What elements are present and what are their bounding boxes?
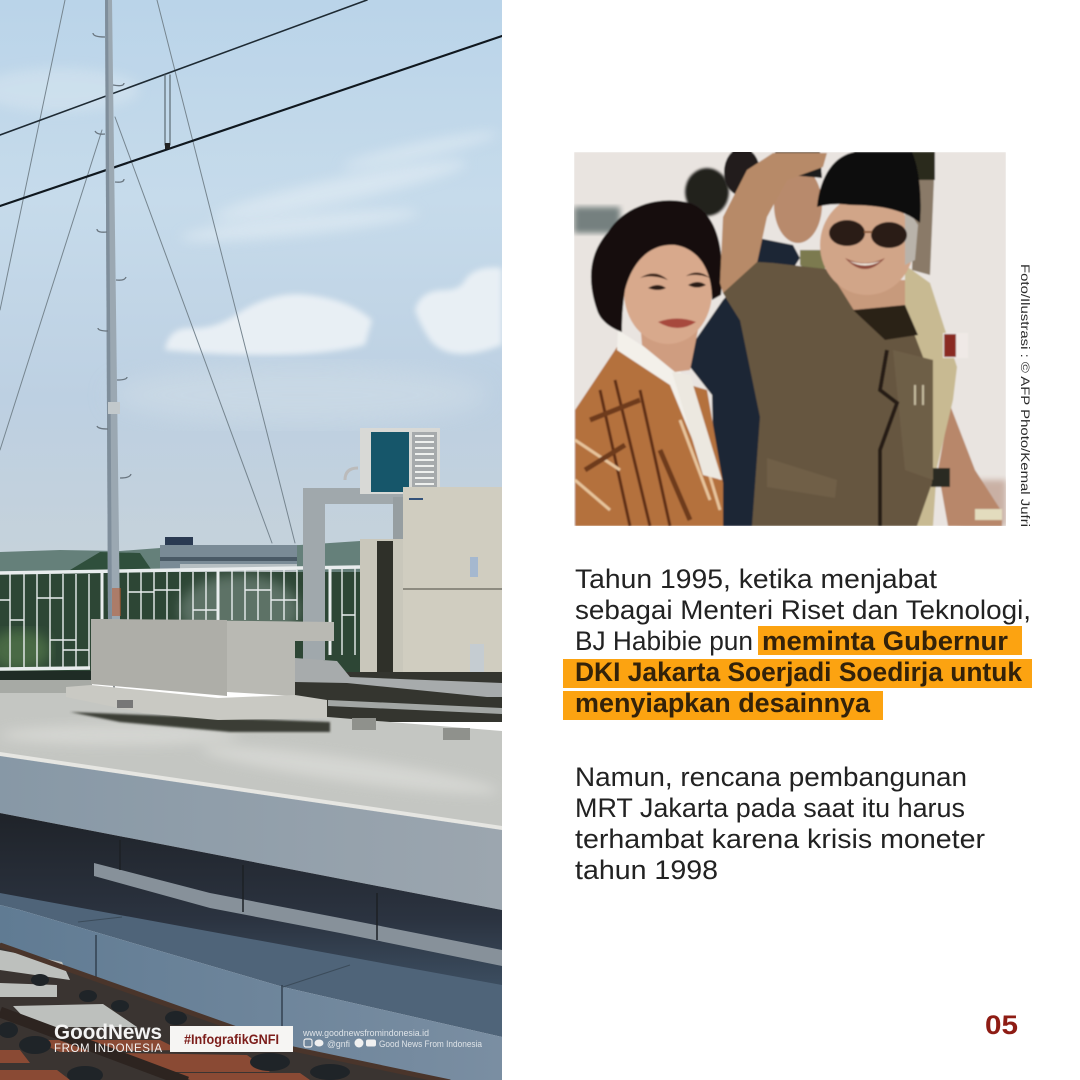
overhead wires bbox=[0, 0, 502, 543]
text block: paragraph 2: Namun, rencana pembangunan bbox=[575, 762, 967, 792]
footer: GoodNews logo bbox=[54, 1021, 162, 1055]
icon: twitter bbox=[314, 1040, 324, 1046]
text block: paragraph 1: BJ Habibie pun bbox=[575, 626, 753, 656]
footer: hashtag badge: #InfografikGNFI bbox=[184, 1032, 279, 1047]
utility pole bbox=[93, 0, 131, 720]
highlight: orange bars bbox=[563, 626, 1032, 720]
white fence railing bbox=[0, 567, 360, 669]
icon: youtube bbox=[366, 1040, 376, 1046]
text block: paragraph 2: tahun 1998 bbox=[575, 855, 718, 885]
text block: paragraph 1: meminta Gubernur bbox=[762, 626, 1008, 656]
blurred background bbox=[574, 148, 1006, 526]
officer in khaki uniform bbox=[893, 152, 1002, 526]
text block: paragraph 1: sebagai Menteri Riset dan Teknologi, bbox=[575, 595, 1031, 625]
icon: instagram bbox=[304, 1039, 312, 1047]
man waving in brown shirt bbox=[720, 152, 933, 526]
clouds in the sky bbox=[0, 68, 502, 425]
slab edge bbox=[0, 756, 502, 910]
roof floor bbox=[0, 693, 502, 830]
footer: GoodNews logo: GoodNews bbox=[54, 1021, 162, 1044]
concrete track wall bbox=[0, 893, 502, 1080]
metal duct tray bbox=[295, 658, 502, 722]
footer: website and social handles: Good News From Indonesia bbox=[379, 1039, 483, 1050]
panel: railway rooftop photo bbox=[0, 0, 502, 1080]
woman in batik jacket bbox=[575, 200, 723, 526]
photo credit: Foto/Ilustrasi : © AFP Photo/Kemal Jufri bbox=[1018, 264, 1030, 527]
AC units on frame bbox=[303, 428, 502, 677]
footer: hashtag badge bbox=[170, 1026, 293, 1052]
panel: photo of BJ Habibie and his wife bbox=[574, 148, 1006, 526]
dark gap with cable tray bbox=[0, 813, 502, 990]
text block: paragraph 2 bbox=[575, 762, 985, 885]
footer: website and social handles: @gnfi bbox=[327, 1039, 350, 1050]
page number: 05 bbox=[985, 1010, 1018, 1040]
text block: paragraph 1: DKI Jakarta Soerjadi Soedirja untuk bbox=[575, 657, 1023, 687]
text block: paragraph 1: menyiapkan desainnya bbox=[575, 688, 871, 718]
footer: website and social handles bbox=[302, 1028, 483, 1050]
distant trees and building bbox=[0, 537, 360, 672]
text block: paragraph 1 bbox=[563, 564, 1032, 720]
text block: paragraph 2: MRT Jakarta pada saat itu harus bbox=[575, 793, 965, 823]
low parapet wall bbox=[0, 680, 92, 694]
man in dark suit behind bbox=[683, 152, 830, 526]
footer: GoodNews logo: FROM INDONESIA bbox=[54, 1043, 162, 1055]
text block: paragraph 2: terhambat karena krisis moneter bbox=[575, 824, 985, 854]
footer: website and social handles: www.goodnewsfromindonesia.id bbox=[302, 1028, 429, 1039]
icon: facebook bbox=[354, 1038, 364, 1048]
railway track bbox=[0, 943, 450, 1080]
text block: paragraph 1: Tahun 1995, ketika menjabat bbox=[575, 564, 938, 594]
concrete block bbox=[66, 619, 470, 740]
